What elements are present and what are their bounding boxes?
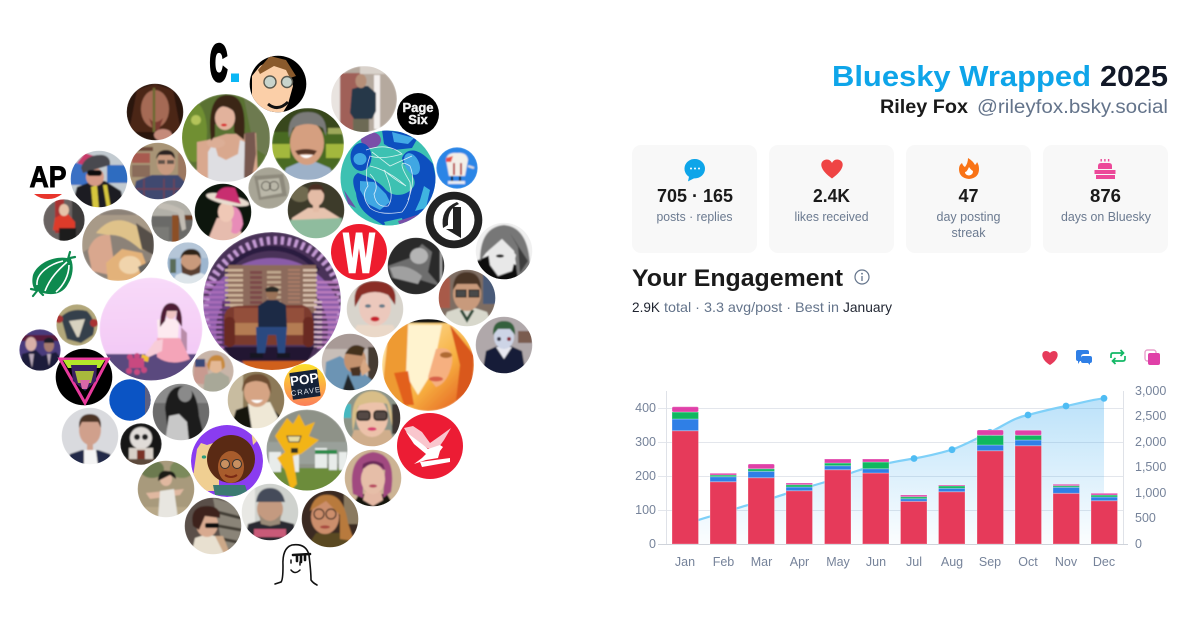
logo: AP: AP — [30, 161, 66, 194]
stat card: likes received: likes received — [794, 210, 869, 224]
avatar: teal and blue abstract artwork — [340, 130, 438, 226]
month labels: Aug — [941, 555, 963, 569]
month labels: Jun — [866, 555, 886, 569]
month labels: Jul — [906, 555, 922, 569]
month labels — [675, 555, 1115, 569]
icon: birthday cake — [1094, 159, 1116, 179]
avatar: cartoon man with glasses — [249, 55, 307, 114]
legend: likes — [1042, 351, 1058, 365]
header: user name and handle — [880, 97, 1168, 118]
left axis labels: 0 — [649, 537, 656, 551]
combo chart: monthly engagement — [635, 384, 1166, 569]
right axis labels: 2,000 — [1135, 435, 1166, 449]
avatar: grey cat on a chair — [151, 200, 194, 243]
avatar: man on leather sofa surrounded by books — [203, 232, 342, 371]
logo: red W: W — [344, 221, 375, 284]
header: title: 2025 — [1100, 61, 1168, 93]
stacked bars — [672, 407, 1118, 544]
left axis labels: 200 — [635, 469, 656, 483]
avatar: dark-haired woman with wand — [126, 83, 184, 141]
icon: speech bubble — [684, 159, 705, 181]
icon: flame — [959, 158, 979, 179]
avatar: man taking mirror selfie — [331, 66, 400, 133]
month labels: Mar — [751, 555, 772, 569]
avatar: woman with pink hair and hat — [194, 183, 252, 242]
avatar: woman in green off-shoulder dress — [287, 181, 345, 240]
avatar: woman with pink background on roller skates — [99, 278, 203, 381]
stat card: days on Bluesky — [1043, 145, 1168, 253]
month labels: Oct — [1018, 555, 1038, 569]
logo: C.: C — [210, 35, 227, 91]
avatar: tattooed woman in white top — [181, 94, 270, 182]
legend: quotes — [1145, 350, 1160, 365]
avatar: man in plaid shirt — [129, 142, 187, 201]
avatar: black and white woman with long hair — [152, 383, 210, 442]
legend: reposts — [1111, 350, 1125, 364]
bar: Dec — [1091, 493, 1118, 544]
logo: Page Six: Page — [402, 100, 434, 115]
right axis labels: 2,500 — [1135, 409, 1166, 423]
stat card: posts and replies: posts · replies — [656, 210, 732, 224]
logo: red eagle — [397, 413, 463, 479]
bar: May — [824, 459, 851, 544]
right axis labels: 3,000 — [1135, 384, 1166, 398]
header: user name and handle: Riley Fox — [880, 97, 968, 118]
avatar: grey sketch — [248, 167, 290, 209]
right axis labels: 1,000 — [1135, 486, 1166, 500]
month labels: Dec — [1093, 555, 1115, 569]
stat card: days on Bluesky: 876 — [1090, 186, 1121, 206]
month labels: Apr — [790, 555, 809, 569]
month labels: Feb — [713, 555, 734, 569]
stat card: posts and replies — [632, 145, 757, 253]
avatar: man in suit on grey — [61, 407, 119, 466]
avatar: cartoon woman with afro and cat — [191, 425, 263, 497]
heading: Your Engagement: Your Engagement — [632, 265, 843, 292]
avatar: woman in red speaking at podium — [43, 199, 85, 242]
logo: black ring with O mark — [426, 192, 482, 248]
avatar: blonde woman with dark glasses — [343, 389, 401, 448]
logo: Pop Crave: POP — [289, 370, 319, 389]
bar: Jan — [672, 407, 698, 544]
left axis labels: 300 — [635, 435, 656, 449]
stat card: days on Bluesky: days on Bluesky — [1061, 210, 1152, 224]
chart legend icons — [1042, 350, 1160, 365]
stat card: posts and replies: 705 · 165 — [657, 186, 733, 206]
bar: Jun — [862, 459, 889, 544]
right axis labels: 500 — [1135, 511, 1156, 525]
avatar: woman with pink hair — [344, 449, 402, 508]
icon: info — [855, 270, 869, 284]
stat card: day posting streak: day posting — [936, 210, 1001, 224]
avatar: girl with flag — [192, 350, 234, 392]
icon: heart — [821, 159, 843, 178]
left axis labels: 100 — [635, 503, 656, 517]
bar: Oct — [1015, 430, 1042, 544]
bar: Apr — [786, 483, 812, 544]
avatar: blonde woman with orange cat — [82, 209, 154, 281]
avatar: two men in suits, purple tint — [19, 329, 61, 371]
right axis labels: 0 — [1135, 537, 1142, 551]
stat card: day posting streak: streak — [952, 226, 986, 240]
right axis labels: 1,500 — [1135, 460, 1166, 474]
stat card: day posting streak: 47 — [958, 186, 978, 206]
logo: Pop Crave: CRAVE — [290, 385, 322, 398]
bar: Jul — [900, 495, 927, 544]
avatar: man in square glasses — [438, 269, 497, 328]
avatar: woman in white dress among trees — [137, 460, 195, 519]
avatar: owl figure on black — [120, 423, 162, 466]
avatar: panther in neon triangle — [56, 349, 112, 405]
avatar: man in denim jacket — [321, 333, 379, 392]
bar: Nov — [1053, 484, 1080, 544]
engagement summary text: 2.9K — [632, 299, 661, 315]
avatar: smiling woman in cream scarf — [227, 371, 285, 430]
bar: Sep — [977, 430, 1004, 544]
avatar: blonde woman in glasses and olive sweater — [301, 490, 360, 549]
avatar: black and white engraving — [387, 237, 445, 295]
avatar: orange-tinted woman's face — [382, 319, 474, 411]
avatar: woman in hat and sunglasses — [70, 150, 129, 209]
avatar: anime character on grey — [475, 316, 533, 375]
left axis labels: 400 — [635, 401, 656, 415]
header: title: Bluesky Wrapped — [832, 61, 1091, 93]
month labels: Sep — [979, 555, 1001, 569]
chart grid and axes — [658, 391, 1128, 544]
avatar: man in baseball cap and tee — [241, 483, 299, 542]
month labels: May — [826, 555, 851, 569]
avatar: popcorn character on blue — [436, 147, 478, 189]
logo: Page Six — [397, 93, 439, 135]
header: user name and handle: @rileyfox.bsky.social — [977, 97, 1168, 118]
bar: Aug — [938, 485, 965, 544]
month labels: Jan — [675, 555, 695, 569]
left axis labels — [635, 401, 656, 551]
avatar: bearded man outdoors — [167, 242, 209, 284]
engagement summary text — [632, 299, 892, 315]
avatar: solid blue — [109, 379, 151, 421]
avatar: red-haired woman with pale skin — [346, 280, 404, 339]
avatar: yellow spiky mascot on football pitch — [266, 410, 348, 492]
stat card: likes received: 2.4K — [813, 186, 850, 206]
bar: Feb — [710, 473, 736, 544]
logo: green onion — [31, 252, 75, 296]
month labels: Nov — [1055, 555, 1078, 569]
avatar bubble cluster — [19, 35, 533, 585]
avatar: black and white blonde woman — [475, 222, 533, 281]
logo: Page Six: Six — [408, 112, 429, 127]
avatar: short-haired person in sunglasses — [184, 497, 242, 556]
logo: hand-drawn face doodle — [275, 545, 317, 585]
engagement summary text: total · 3.3 avg/post · Best in — [664, 299, 839, 315]
logo: red W — [331, 221, 387, 284]
logo: Pop Crave — [284, 364, 326, 406]
stat card: day posting streak — [906, 145, 1031, 253]
stat card: likes received — [769, 145, 894, 253]
cumulative area and line — [685, 395, 1107, 544]
engagement summary text: January — [843, 299, 892, 315]
avatar: opossum illustration — [55, 304, 98, 346]
legend: replies — [1076, 350, 1092, 365]
right axis labels — [1135, 384, 1166, 551]
bar: Mar — [748, 464, 774, 544]
avatar: smiling grey-haired man with moustache — [272, 108, 344, 180]
